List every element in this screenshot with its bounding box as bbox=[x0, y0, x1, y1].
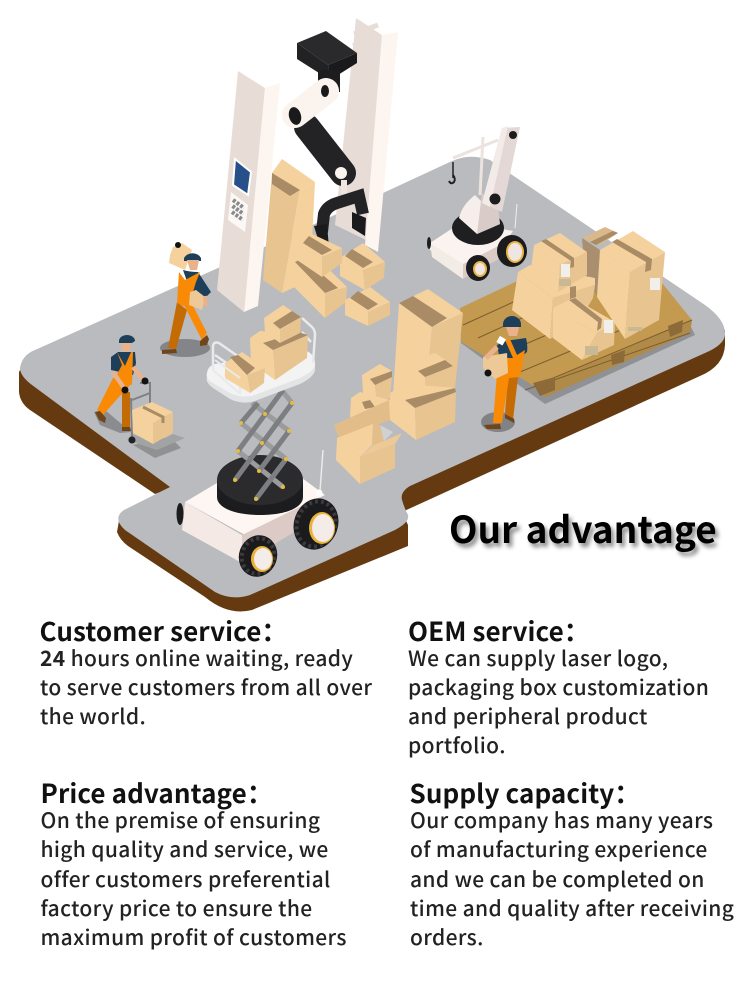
box bbox=[340, 243, 385, 290]
tall box bbox=[393, 289, 463, 402]
text block: price advantage: maximum profit of customers bbox=[40, 922, 347, 952]
lift platform bbox=[207, 318, 315, 403]
robot base bbox=[430, 222, 513, 268]
front box bbox=[553, 286, 615, 360]
gripper bbox=[322, 196, 363, 232]
hand truck box bbox=[132, 402, 173, 444]
box bbox=[297, 233, 342, 277]
scissor lift robot bbox=[176, 305, 346, 582]
crane robot bbox=[427, 126, 527, 281]
text block: price advantage: On the premise of ensuring bbox=[40, 805, 320, 835]
box bbox=[345, 287, 390, 326]
text block: supply capacity bbox=[410, 774, 734, 952]
boxes on pallet bbox=[512, 227, 665, 360]
left pillar with control panel bbox=[217, 71, 280, 312]
tall box bbox=[597, 231, 665, 339]
factory floor platform bbox=[19, 157, 725, 611]
text block: OEM service: We can supply laser logo, bbox=[408, 643, 668, 673]
text block: customer service: Customer service： bbox=[40, 612, 288, 649]
text block: OEM service: packaging box customization bbox=[408, 672, 709, 702]
robot wheels bbox=[466, 255, 490, 281]
text block: supply capacity: orders. bbox=[410, 922, 484, 952]
turntable bbox=[217, 455, 303, 515]
small box bbox=[350, 392, 390, 418]
small box bbox=[362, 364, 392, 404]
tall cardboard box bbox=[263, 159, 315, 293]
text block: price advantage: high quality and service, we bbox=[40, 834, 329, 864]
box bbox=[290, 253, 347, 318]
text block: customer service: the world. bbox=[40, 701, 146, 731]
box bbox=[410, 353, 453, 400]
text block: OEM service: and peripheral product bbox=[408, 701, 648, 731]
text block: price advantage bbox=[40, 774, 347, 952]
text block: customer service: to serve customers from all over bbox=[40, 672, 372, 702]
text block: supply capacity: time and quality after receiving bbox=[410, 893, 734, 923]
text block: customer service bbox=[40, 612, 372, 731]
worker with hand truck bbox=[94, 335, 185, 458]
text block: supply capacity: of manufacturing experience bbox=[410, 834, 708, 864]
text block: OEM service: portfolio. bbox=[408, 730, 506, 760]
open box bbox=[334, 400, 402, 484]
keypad bbox=[228, 192, 248, 232]
text block: customer service: 24 hours online waiting, ready bbox=[40, 643, 353, 673]
text block: OEM service bbox=[408, 612, 709, 760]
robot arm bbox=[287, 31, 366, 248]
text block: OEM service: OEM service： bbox=[408, 612, 590, 649]
box stack beside arm bbox=[290, 233, 390, 326]
big box bbox=[512, 265, 595, 339]
box bbox=[390, 384, 456, 440]
text block: supply capacity: Our company has many years bbox=[410, 805, 713, 835]
top box bbox=[531, 233, 587, 292]
right pillar bbox=[335, 18, 398, 252]
wheels bbox=[233, 530, 283, 582]
text block: supply capacity: and we can be completed on bbox=[410, 864, 705, 894]
text block: price advantage: offer customers preferential bbox=[40, 864, 331, 894]
text block: price advantage: factory price to ensure the bbox=[40, 893, 312, 923]
control panel screen bbox=[233, 159, 251, 195]
lift boxes bbox=[250, 331, 308, 380]
shoulder box bbox=[169, 242, 192, 270]
text block: supply capacity: Supply capacity： bbox=[410, 774, 640, 811]
central box stack bbox=[334, 289, 463, 484]
robot body bbox=[185, 478, 325, 535]
back dark box bbox=[582, 227, 618, 297]
scissor lift bbox=[233, 382, 294, 501]
pallet bbox=[460, 275, 695, 404]
text block: price advantage: Price advantage： bbox=[40, 774, 273, 811]
title: Our advantage: Our advantage bbox=[449, 500, 717, 554]
worker with clipboard bbox=[481, 316, 527, 432]
worker carrying boxes bbox=[160, 242, 211, 357]
